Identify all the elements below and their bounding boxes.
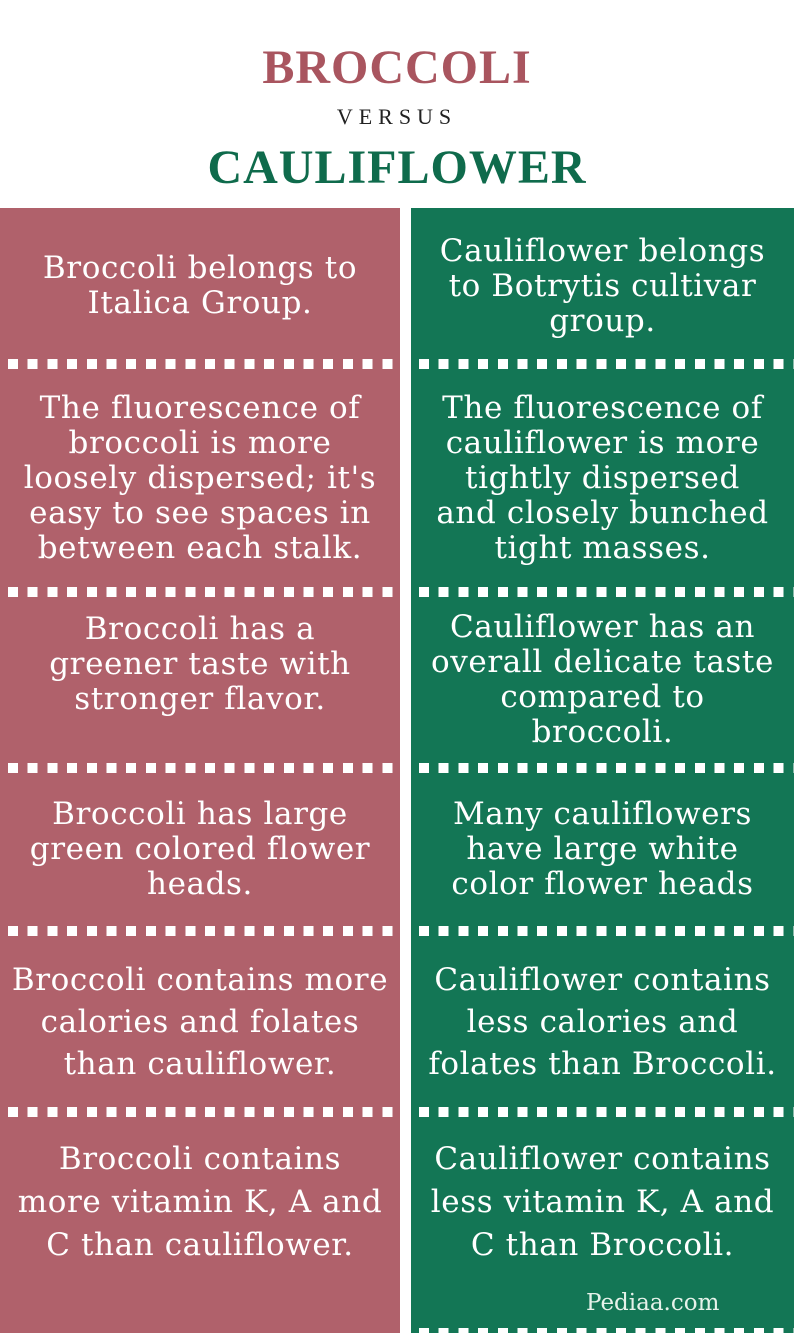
text: taste	[49, 610, 351, 716]
text: fluorescence	[24, 390, 376, 566]
text: flower heads: Broccoli has large	[52, 796, 348, 832]
text: flower heads: green colored flower	[30, 831, 370, 867]
text: calories: than cauliflower.	[64, 1046, 336, 1082]
text: fluorescence: loosely dispersed; it's	[24, 460, 376, 496]
text: fluorescence	[436, 390, 769, 566]
text: vitamins	[431, 1140, 774, 1262]
text: calories	[12, 962, 388, 1082]
text: calories: folates than Broccoli.	[428, 1046, 777, 1082]
text: calories: less calories and	[467, 1004, 738, 1040]
text: fluorescence: tightly dispersed	[465, 460, 740, 496]
text: taste	[431, 609, 774, 750]
text: group: Broccoli belongs to	[43, 250, 357, 286]
text: fluorescence: between each stalk.	[38, 530, 362, 566]
text: flower heads: heads.	[147, 866, 253, 902]
text: fluorescence: cauliflower is more	[446, 424, 759, 460]
text: vitamins: Cauliflower contains	[434, 1140, 771, 1176]
text: fluorescence: tight masses.	[494, 530, 711, 566]
text: group	[43, 250, 357, 321]
text: group: Italica Group.	[87, 285, 312, 321]
text: flower heads	[30, 796, 370, 902]
text: vitamins: Broccoli contains	[59, 1140, 341, 1176]
text: group: Cauliflower belongs	[440, 232, 765, 268]
text: taste: Cauliflower has an	[450, 609, 755, 645]
text: group	[440, 232, 765, 338]
text: taste: greener taste with	[49, 646, 351, 682]
text: calories: calories and folates	[41, 1004, 359, 1040]
text: group: to Botrytis cultivar	[449, 268, 756, 304]
text: vitamins: less vitamin K, A and	[431, 1184, 774, 1220]
title: broccoli: BROCCOLI	[262, 41, 532, 94]
text: vitamins	[18, 1140, 382, 1262]
title: cauliflower: CAULIFLOWER	[207, 141, 587, 194]
text: taste: broccoli.	[532, 714, 673, 750]
text: calories	[428, 962, 777, 1082]
text: flower heads: color flower heads	[451, 866, 754, 902]
text: group: group.	[549, 302, 656, 338]
text: taste: Broccoli has a	[85, 610, 315, 646]
text: calories: Broccoli contains more	[12, 962, 388, 998]
text: fluorescence: and closely bunched	[436, 494, 769, 530]
text: flower heads: Many cauliflowers	[453, 796, 752, 832]
panel: broccoli	[0, 208, 400, 1333]
text: flower heads: have large white	[466, 831, 739, 867]
text: fluorescence: easy to see spaces in	[29, 494, 371, 530]
text: fluorescence: broccoli is more	[69, 424, 331, 460]
logo: pediaa: Pediaa.com	[586, 1290, 719, 1316]
text: vitamins: C than cauliflower.	[46, 1226, 354, 1262]
text: vitamins: more vitamin K, A and	[18, 1184, 382, 1220]
text: calories: Cauliflower contains	[434, 962, 771, 998]
text: fluorescence: The fluorescence of	[442, 390, 763, 426]
text: taste: stronger flavor.	[74, 680, 326, 716]
panel: cauliflower	[411, 208, 794, 1333]
text: flower heads	[451, 796, 754, 902]
text: fluorescence: The fluorescence of	[40, 390, 360, 426]
text: taste: compared to	[500, 679, 705, 715]
text: vitamins: C than Broccoli.	[471, 1226, 734, 1262]
subtitle: versus: VERSUS	[337, 104, 457, 129]
text: taste: overall delicate taste	[431, 644, 774, 680]
